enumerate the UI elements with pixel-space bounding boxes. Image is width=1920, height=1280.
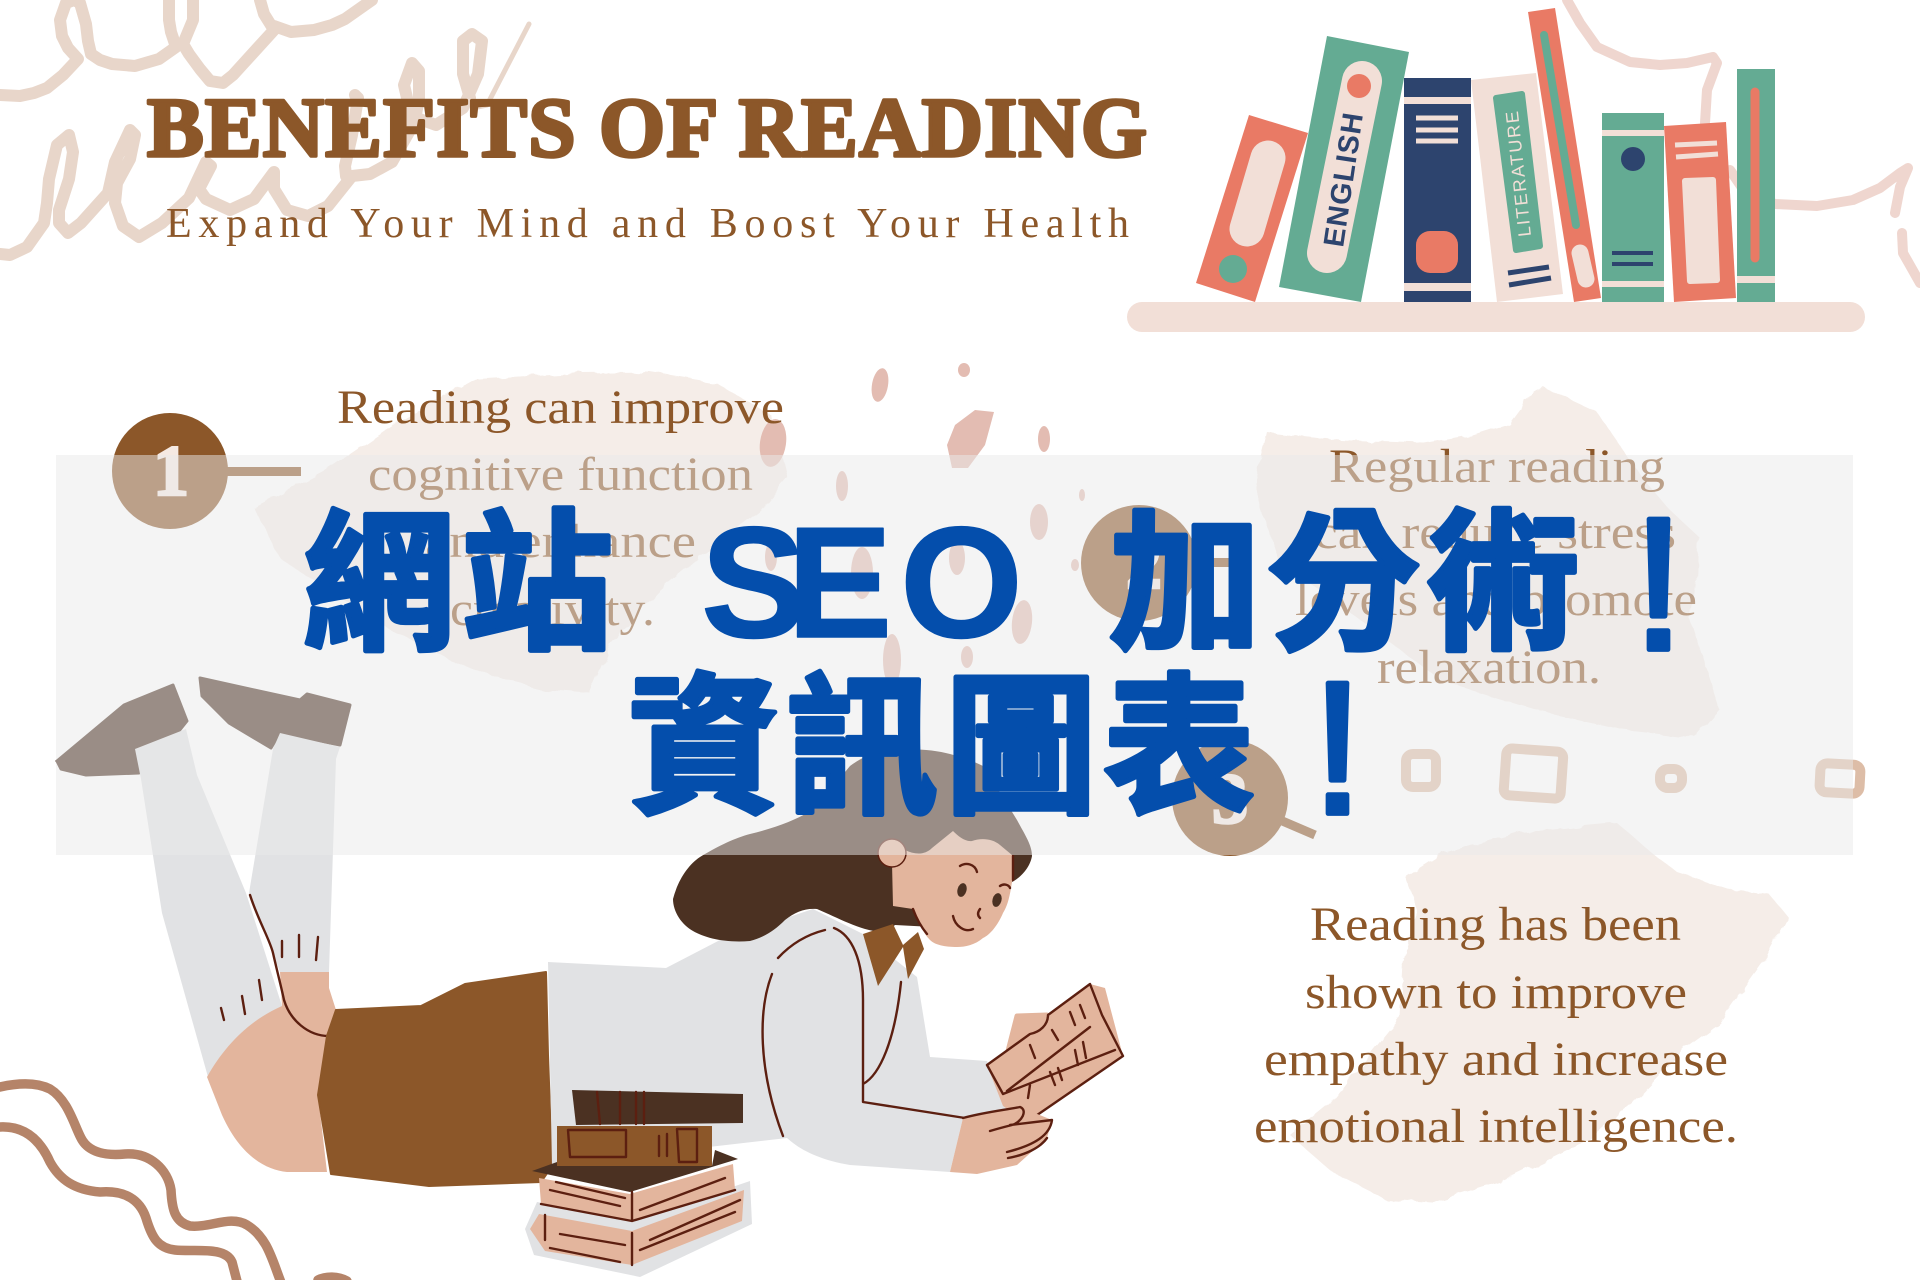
title: BENEFITS OF READING [147, 81, 1147, 175]
text block: benefit 2 [1295, 440, 1697, 694]
text block: benefit 3: emotional intelligence. [1254, 1100, 1738, 1153]
number badge 2 [1081, 505, 1245, 621]
paint speckles [757, 363, 1085, 686]
book: navy [1404, 78, 1471, 302]
overlay headline line 1: E [787, 495, 892, 671]
book: English: ENGLISH [1318, 111, 1370, 249]
illustration: bookshelf with books [1127, 8, 1865, 332]
subtitle: Expand Your Mind and Boost Your Health [166, 201, 1129, 247]
leg: far sock [249, 733, 340, 972]
overlay headline line 1: ！ [1578, 506, 1739, 667]
book stack [525, 1090, 752, 1277]
decorative outline squares [1406, 748, 1861, 799]
number badge 3: 3 [1212, 759, 1248, 839]
text block: benefit 1: creativity. [450, 583, 655, 636]
text block: benefit 1: cognitive function [368, 448, 753, 501]
overlay headline line 2: ！ [1257, 670, 1418, 831]
shelf [1127, 302, 1865, 332]
overlay headline line 1: S [701, 495, 806, 671]
number badge 1: 1 [153, 431, 189, 511]
illustration: girl reading [57, 678, 1123, 1277]
overlay headline line 2: 訊 [786, 664, 938, 834]
paper blob: benefit 3 [1290, 823, 1788, 1203]
decorative scribble: top right [1567, 0, 1920, 283]
text block: benefit 1 [337, 381, 784, 636]
text block: benefit 2: can reduce stress [1314, 506, 1676, 559]
paper blob: benefit 1 [253, 372, 787, 693]
overlay headline line 1: O [900, 495, 1023, 671]
translucent band [56, 455, 1853, 855]
front hand [950, 1107, 1052, 1174]
book: green tall [1737, 69, 1775, 302]
collar [863, 924, 924, 986]
book: coral upright [1664, 122, 1736, 302]
paper blob: benefit 2 [1254, 388, 1720, 738]
overlay headline line 2: 表 [1103, 664, 1255, 834]
book: English [1279, 36, 1409, 302]
face [892, 831, 1012, 947]
book: thin coral [1528, 8, 1601, 302]
thigh [207, 972, 336, 1172]
text block: benefit 3: shown to improve [1305, 966, 1687, 1019]
open book [987, 984, 1123, 1122]
decorative scribble: top left [0, 0, 529, 255]
text block: benefit 2: levels and promote [1295, 573, 1697, 626]
decorative wavy lines: bottom left [0, 1084, 347, 1280]
text block: benefit 3: empathy and increase [1264, 1033, 1728, 1086]
book: green with dot [1602, 113, 1664, 302]
number badge 2: 2 [1126, 524, 1162, 604]
facial features [913, 856, 1013, 934]
overlay headline line 2: 圖 [945, 664, 1097, 834]
overlay headline line 1: 加 [1109, 500, 1261, 670]
hand behind book [1007, 1015, 1070, 1060]
overlay headline line 1: 分 [1268, 500, 1420, 670]
overlay headline line 2: 資 [628, 664, 780, 834]
overlay headline line 1: 術 [1427, 500, 1579, 670]
sweater lines [763, 928, 965, 1136]
torso and arm [548, 909, 1010, 1172]
book: coral tilted [1196, 115, 1308, 302]
shoes [57, 678, 350, 775]
overlay headline line 1: 站 [461, 500, 613, 670]
number badge 1 [112, 413, 301, 529]
text block: benefit 3 [1254, 898, 1738, 1153]
text block: benefit 2: relaxation. [1377, 641, 1601, 694]
leg details [221, 895, 329, 1036]
book: Literature: LITERATURE [1502, 110, 1535, 238]
leg: near sock [135, 729, 282, 1077]
text block: benefit 1: Reading can improve [337, 381, 784, 434]
text block: benefit 1: and enhance [425, 515, 696, 568]
number badge 3 [1172, 740, 1315, 856]
overlay headline line 1: 網 [303, 500, 455, 670]
text block: benefit 3: Reading has been [1310, 898, 1681, 951]
ear [878, 839, 906, 867]
text block: benefit 2: Regular reading [1329, 440, 1665, 493]
book: Literature [1471, 73, 1563, 302]
skirt [318, 972, 552, 1186]
hair [673, 749, 1032, 941]
